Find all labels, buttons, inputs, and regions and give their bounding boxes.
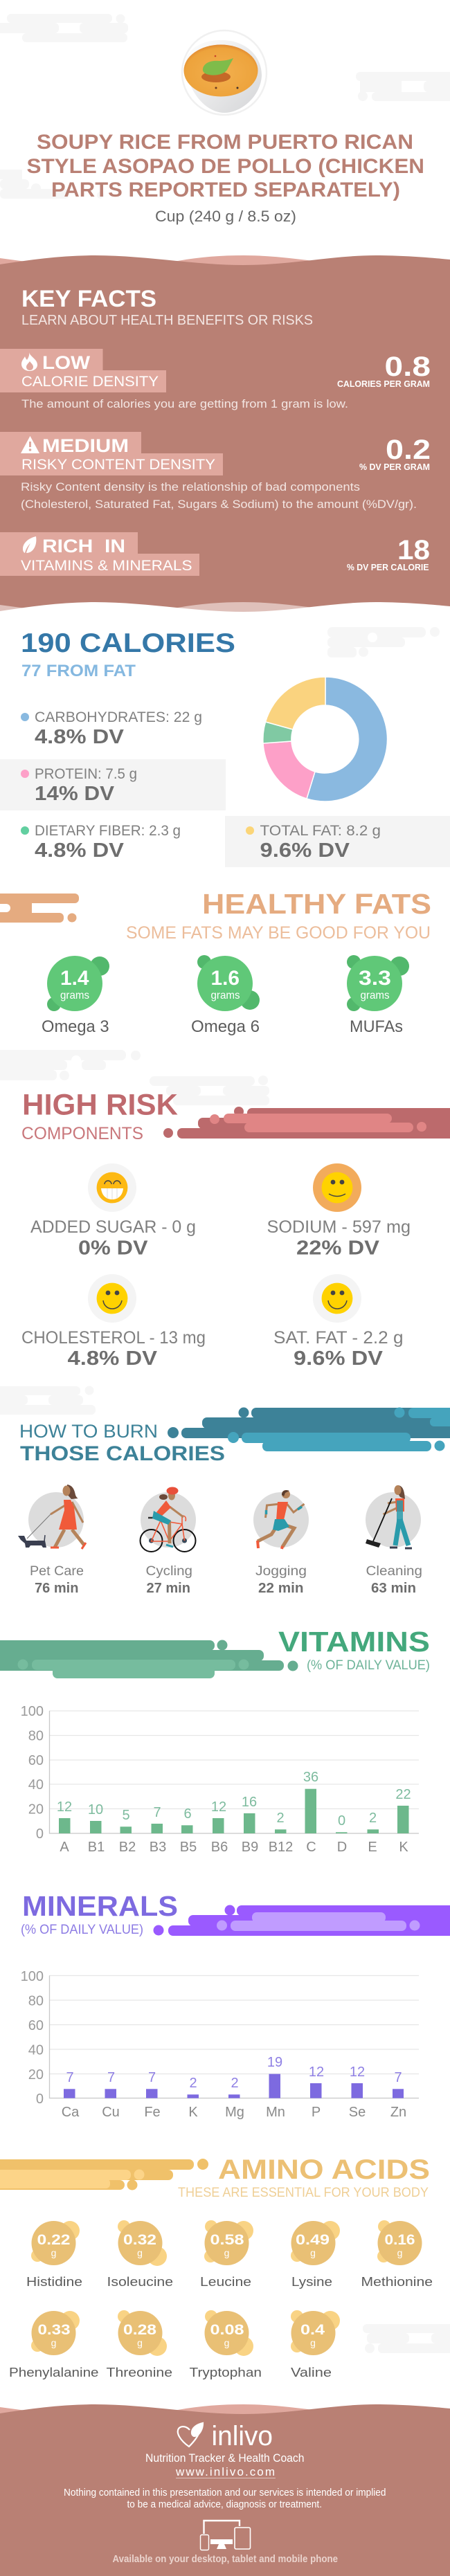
- panel: footer: [0, 2404, 450, 2576]
- bar chart: minerals: 7: [394, 2070, 402, 2085]
- histidine: 0.22: [37, 2232, 71, 2248]
- bar chart: vitamins: B5: [180, 1840, 197, 1855]
- minerals heading: MINERALS: [22, 1890, 178, 1922]
- leucine: [200, 2220, 253, 2289]
- icon: jogging: [253, 1490, 309, 1549]
- panel: amino acids: [0, 2155, 450, 2379]
- bar chart: vitamins: E: [368, 1840, 377, 1855]
- label: pet care: Pet Care: [30, 1564, 84, 1579]
- label: cleaning: Cleaning: [366, 1564, 422, 1579]
- bar chart: vitamins: 0: [338, 1813, 345, 1829]
- valine: [291, 2310, 340, 2379]
- omega 3: 1.4: [60, 967, 89, 990]
- label: jogging: [255, 1564, 307, 1596]
- bar chart: minerals: 100: [21, 1969, 44, 1984]
- sodium: SODIUM - 597 mg: [267, 1217, 411, 1237]
- omega 6: 1.6: [210, 967, 240, 990]
- isoleucine: 0.32: [123, 2232, 156, 2248]
- bar chart: minerals: 12: [309, 2065, 324, 2080]
- low calorie density: [0, 349, 431, 410]
- low calorie density: The amount of calories you are getting from 1 gram is low.: [21, 397, 348, 410]
- lysine: [291, 2221, 340, 2289]
- phenylalanine: 0.33: [37, 2322, 71, 2338]
- legend: carbohydrates: CARBOHYDRATES: 22 g: [35, 709, 202, 725]
- bar chart: minerals: Se: [349, 2105, 366, 2120]
- tryptophan: 0.08: [210, 2322, 244, 2338]
- decorative header clouds: [0, 14, 450, 199]
- bar chart: minerals: 60: [28, 2018, 44, 2033]
- bar chart: vitamins: 5: [122, 1808, 130, 1823]
- bar chart: vitamins: 0: [36, 1826, 44, 1842]
- decorative clouds: [0, 1386, 450, 1451]
- methionine: g: [397, 2247, 402, 2258]
- bar chart: vitamins: A: [60, 1840, 69, 1855]
- amino acids heading: AMINO ACIDS: [218, 2155, 430, 2185]
- rich in vitamins and minerals: [0, 532, 430, 576]
- label: pet care: 76 min: [35, 1581, 79, 1596]
- medium risky content density: 0.2: [386, 435, 431, 465]
- medium risky content density: % DV PER GRAM: [359, 462, 430, 472]
- icon: pet care: [18, 1485, 86, 1549]
- legend: dietary fiber: [21, 823, 181, 862]
- title: SOUPY RICE FROM PUERTO RICAN: [37, 131, 413, 154]
- tryptophan: [190, 2310, 262, 2379]
- bar chart: vitamins: 16: [242, 1795, 257, 1810]
- bar chart: vitamins: 6: [183, 1806, 192, 1822]
- omega 6: Omega 6: [191, 1017, 260, 1036]
- availability note: Available on your desktop, tablet and mobile phone: [112, 2553, 338, 2565]
- food image: bowl of soup: [182, 30, 267, 115]
- calories from fat: 77 FROM FAT: [21, 662, 136, 680]
- icon: warning triangle: [21, 436, 39, 453]
- rich in vitamins and minerals: % DV PER CALORIE: [347, 563, 429, 572]
- legend: protein: 14% DV: [35, 783, 115, 805]
- threonine: 0.28: [123, 2322, 156, 2338]
- bar chart: minerals: [21, 1969, 419, 2120]
- cholesterol: CHOLESTEROL - 13 mg: [21, 1328, 206, 1348]
- title: STYLE ASOPAO DE POLLO (CHICKEN: [26, 155, 424, 178]
- bar chart: minerals: 12: [350, 2065, 365, 2080]
- decorative orange cloud: [0, 894, 79, 923]
- saturated fat: 9.6% DV: [294, 1348, 384, 1370]
- bar chart: vitamins: 36: [303, 1770, 318, 1785]
- leucine: g: [224, 2247, 229, 2258]
- panel: how to burn calories: [0, 1386, 450, 1596]
- omega 6: grams: [210, 990, 240, 1001]
- sodium: 22% DV: [296, 1237, 380, 1260]
- bar chart: vitamins: 12: [57, 1799, 72, 1815]
- legend: protein: [0, 759, 226, 810]
- mufas: MUFAs: [350, 1017, 403, 1036]
- bar chart: vitamins: B1: [88, 1840, 105, 1855]
- bar chart: minerals: Zn: [390, 2105, 406, 2120]
- disclaimer: to be a medical advice, diagnosis or treatment.: [127, 2499, 322, 2510]
- low calorie density: CALORIE DENSITY: [21, 374, 159, 390]
- medium risky content density: RISKY CONTENT DENSITY: [21, 457, 215, 473]
- label: cycling: Cycling: [145, 1564, 192, 1579]
- vitamins subheading: (% OF DAILY VALUE): [307, 1658, 430, 1673]
- bar chart: vitamins: 20: [28, 1802, 44, 1817]
- icon: cycling: [140, 1487, 196, 1552]
- cholesterol: [21, 1274, 206, 1370]
- label: jogging: Jogging: [255, 1564, 307, 1579]
- omega 6: [191, 955, 260, 1036]
- green cloud: [0, 1640, 298, 1678]
- amino acids subheading: THESE ARE ESSENTIAL FOR YOUR BODY: [178, 2186, 429, 2200]
- cholesterol: 4.8% DV: [68, 1348, 158, 1370]
- bar chart: vitamins: [21, 1704, 419, 1855]
- bar chart: minerals: Mg: [225, 2105, 244, 2120]
- bar chart: vitamins: C: [306, 1840, 316, 1855]
- sodium: [267, 1163, 411, 1260]
- label: pet care: [30, 1564, 84, 1596]
- bar chart: vitamins: 10: [88, 1802, 103, 1817]
- bar chart: vitamins: 100: [21, 1704, 44, 1719]
- medium risky content density: (Cholesterol, Saturated Fat, Sugars & Sodium) to the amount (%DV/gr).: [21, 498, 417, 511]
- isoleucine: [107, 2220, 173, 2289]
- tryptophan: g: [224, 2337, 229, 2348]
- bar chart: minerals: 80: [28, 1993, 44, 2008]
- label: cycling: [145, 1564, 192, 1596]
- phenylalanine: Phenylalanine: [9, 2365, 98, 2379]
- tagline: Nutrition Tracker & Health Coach: [145, 2452, 305, 2465]
- histidine: [26, 2221, 82, 2289]
- isoleucine: Isoleucine: [107, 2274, 173, 2289]
- panel: key facts: [0, 255, 450, 637]
- bar chart: minerals: 2: [231, 2076, 239, 2091]
- isoleucine: g: [137, 2247, 143, 2258]
- legend: total fat: [225, 816, 450, 867]
- saturated fat: SAT. FAT - 2.2 g: [273, 1328, 403, 1348]
- leucine: 0.58: [210, 2232, 244, 2248]
- added sugar: ADDED SUGAR - 0 g: [30, 1217, 196, 1237]
- vitamins heading: VITAMINS: [278, 1626, 430, 1658]
- healthy fats subheading: SOME FATS MAY BE GOOD FOR YOU: [126, 923, 431, 943]
- panel: calories: [0, 627, 450, 867]
- medium risky content density: [0, 432, 431, 511]
- bar chart: vitamins: B2: [119, 1840, 136, 1855]
- legend: dietary fiber: 4.8% DV: [35, 840, 125, 862]
- valine: 0.4: [300, 2322, 325, 2338]
- high risk heading: HIGH RISK: [22, 1088, 178, 1121]
- low calorie density: 0.8: [385, 352, 431, 382]
- low calorie density: CALORIES PER GRAM: [337, 379, 430, 389]
- panel: minerals: [21, 1890, 450, 2120]
- healthy fats heading: HEALTHY FATS: [202, 888, 431, 920]
- bar chart: minerals: 0: [36, 2092, 44, 2107]
- bar chart: vitamins: 2: [276, 1811, 285, 1826]
- label: cleaning: 63 min: [371, 1581, 416, 1596]
- histidine: g: [51, 2247, 56, 2258]
- valine: Valine: [291, 2365, 332, 2379]
- phenylalanine: [9, 2311, 98, 2379]
- legend: carbohydrates: 4.8% DV: [35, 726, 125, 748]
- label: jogging: 22 min: [258, 1581, 303, 1596]
- bar chart: vitamins: B12: [269, 1840, 293, 1855]
- saturated fat: [273, 1274, 403, 1370]
- title: [26, 131, 424, 201]
- mufas: 3.3: [359, 967, 391, 990]
- decorative grey clouds: [0, 1050, 269, 1105]
- methionine: [361, 2220, 433, 2289]
- bar chart: minerals: 7: [107, 2070, 115, 2085]
- serving size: Cup (240 g / 8.5 oz): [155, 208, 296, 225]
- bar chart: minerals: 19: [267, 2055, 282, 2070]
- bar chart: minerals: Fe: [144, 2105, 161, 2120]
- bar chart: vitamins: 2: [369, 1811, 377, 1826]
- bar chart: vitamins: 80: [28, 1729, 44, 1744]
- bar chart: minerals: Mn: [266, 2105, 285, 2120]
- medium risky content density: Risky Content density is the relationship of bad components: [21, 480, 360, 493]
- added sugar: [30, 1163, 196, 1260]
- bar chart: minerals: 7: [148, 2070, 156, 2085]
- methionine: 0.16: [385, 2232, 415, 2248]
- omega 3: Omega 3: [42, 1017, 109, 1036]
- bar chart: minerals: K: [188, 2105, 198, 2120]
- bar chart: vitamins: K: [399, 1840, 408, 1855]
- how to burn heading: HOW TO BURN: [19, 1421, 158, 1442]
- rich in vitamins and minerals: RICH IN: [42, 536, 125, 556]
- icon: cleaning: [366, 1485, 421, 1548]
- label: cycling: 27 min: [147, 1581, 190, 1596]
- panel: high risk components: [21, 1088, 450, 1370]
- icon: inlivo heart logo: [178, 2423, 203, 2447]
- threonine: g: [137, 2337, 143, 2348]
- mufas: grams: [360, 990, 389, 1001]
- medium risky content density: MEDIUM: [42, 435, 129, 456]
- logo wordmark: inlivo: [212, 2421, 273, 2451]
- key facts heading: KEY FACTS: [21, 286, 156, 312]
- bar chart: vitamins: B3: [150, 1840, 166, 1855]
- yellow cloud: [0, 2159, 208, 2190]
- decorative cloud: [363, 2324, 450, 2353]
- label: cleaning: [366, 1564, 422, 1596]
- legend: total fat: TOTAL FAT: 8.2 g: [260, 823, 381, 839]
- panel: vitamins: [0, 1626, 430, 1855]
- bar chart: vitamins: D: [337, 1840, 347, 1855]
- bar chart: vitamins: 60: [28, 1753, 44, 1768]
- bar chart: minerals: 40: [28, 2043, 44, 2058]
- website link: www.inlivo.com: [175, 2465, 275, 2478]
- bar chart: vitamins: B9: [242, 1840, 258, 1855]
- rich in vitamins and minerals: 18: [397, 535, 430, 565]
- added sugar: 0% DV: [78, 1237, 148, 1260]
- histidine: Histidine: [26, 2274, 82, 2289]
- rich in vitamins and minerals: VITAMINS & MINERALS: [21, 558, 192, 574]
- legend: protein: PROTEIN: 7.5 g: [35, 766, 137, 782]
- panel: healthy fats: [0, 888, 431, 1036]
- lysine: Lysine: [291, 2274, 332, 2289]
- bar chart: minerals: 7: [66, 2070, 74, 2085]
- leucine: Leucine: [200, 2274, 251, 2289]
- title: PARTS REPORTED SEPARATELY): [51, 179, 400, 201]
- bar chart: minerals: Ca: [62, 2105, 80, 2120]
- bar chart: minerals: 20: [28, 2067, 44, 2083]
- bar chart: minerals: Cu: [102, 2105, 120, 2120]
- disclaimer: [64, 2487, 386, 2510]
- bar chart: vitamins: 7: [153, 1805, 161, 1820]
- key facts subheading: LEARN ABOUT HEALTH BENEFITS OR RISKS: [21, 313, 313, 328]
- those calories heading: THOSE CALORIES: [20, 1442, 225, 1465]
- valine: g: [310, 2337, 316, 2348]
- mufas: [347, 955, 409, 1036]
- low calorie density: LOW: [42, 352, 91, 373]
- icon: devices: [201, 2521, 251, 2550]
- tryptophan: Tryptophan: [190, 2365, 262, 2379]
- minerals subheading: (% OF DAILY VALUE): [21, 1923, 143, 1937]
- purple cloud: [154, 1905, 450, 1936]
- red cloud: [163, 1107, 450, 1139]
- methionine: Methionine: [361, 2274, 433, 2289]
- threonine: Threonine: [107, 2365, 172, 2379]
- bar chart: vitamins: 12: [211, 1799, 226, 1815]
- donut chart: [263, 677, 388, 801]
- legend: carbohydrates: [21, 709, 202, 748]
- bar chart: minerals: 2: [189, 2076, 197, 2091]
- phenylalanine: g: [51, 2337, 56, 2348]
- lysine: 0.49: [296, 2232, 330, 2248]
- icon: leaf: [23, 536, 36, 553]
- omega 3: [42, 956, 109, 1036]
- components subheading: COMPONENTS: [21, 1124, 143, 1143]
- legend: dietary fiber: DIETARY FIBER: 2.3 g: [35, 823, 181, 839]
- legend: total fat: 9.6% DV: [260, 840, 350, 862]
- disclaimer: Nothing contained in this presentation and our services is intended or implied: [64, 2487, 386, 2498]
- threonine: [107, 2310, 172, 2379]
- lysine: g: [310, 2247, 316, 2258]
- calories heading: 190 CALORIES: [21, 628, 235, 658]
- bar chart: minerals: P: [312, 2105, 321, 2120]
- bar chart: vitamins: 22: [395, 1787, 411, 1802]
- bar chart: vitamins: B6: [211, 1840, 228, 1855]
- icon: flame: [21, 352, 37, 371]
- bar chart: vitamins: 40: [28, 1777, 44, 1793]
- omega 3: grams: [60, 990, 89, 1001]
